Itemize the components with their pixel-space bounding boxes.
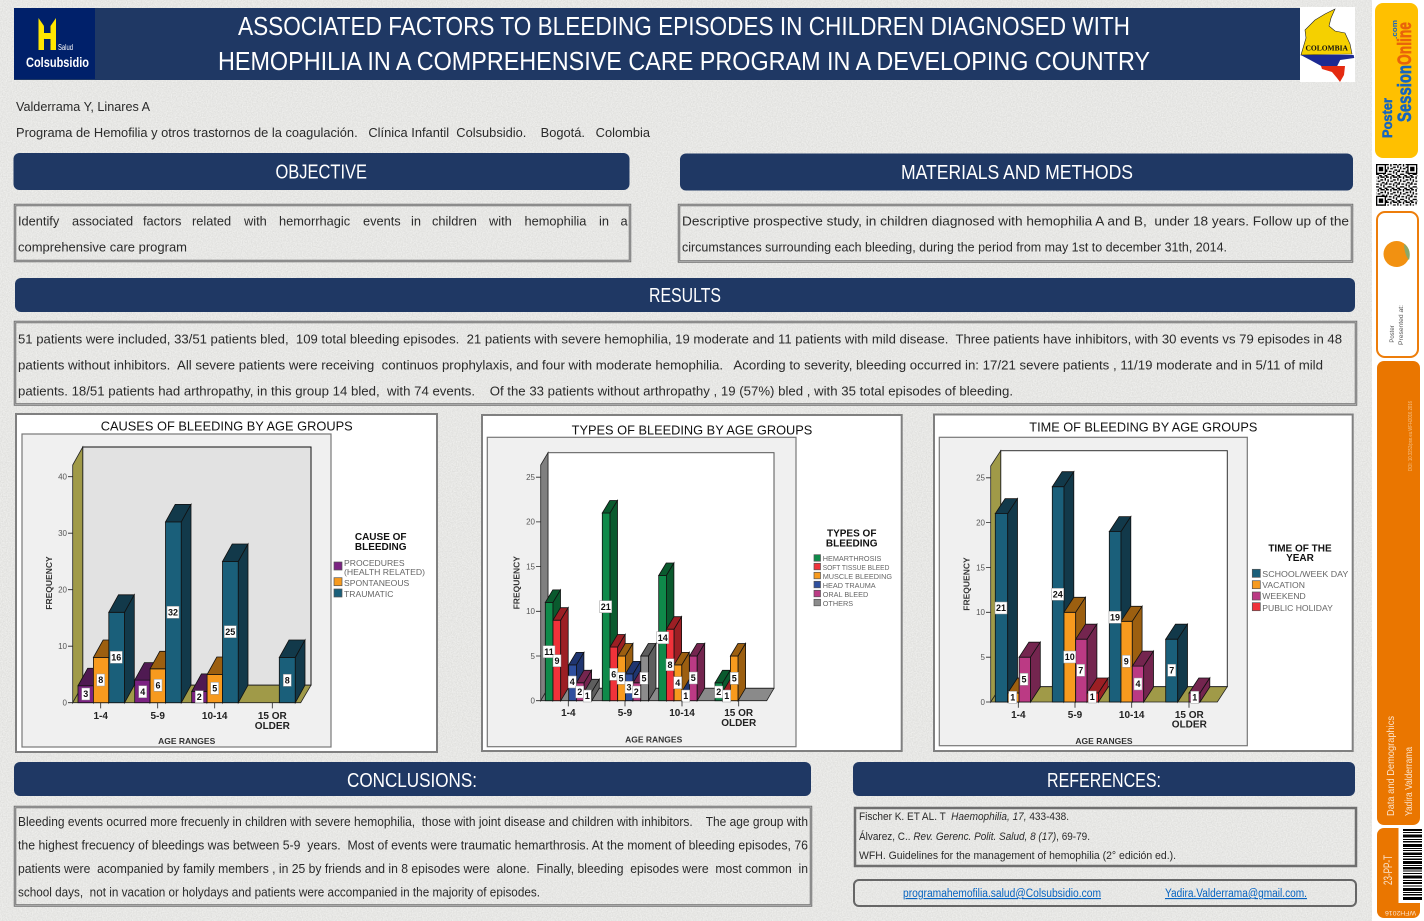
x axis: 15 OR bbox=[724, 708, 754, 719]
x axis: OLDER bbox=[1172, 720, 1208, 730]
value labels: 5 bbox=[618, 674, 624, 684]
panel: references list: Álvarez, C.. Rev. Gerenc. Polit. Salud, 8 (17), 69-79. bbox=[859, 830, 1090, 843]
x axis bbox=[561, 701, 757, 744]
value labels: 19 bbox=[1110, 612, 1120, 622]
sidebar: poster code and barcode: 23-PP-T bbox=[1381, 855, 1395, 885]
legend: PUBLIC HOLIDAY bbox=[1262, 603, 1333, 613]
x axis: 5-9 bbox=[150, 711, 165, 722]
legend: MUSCLE BLEEDING bbox=[823, 572, 892, 581]
value labels: 14 bbox=[658, 633, 668, 643]
value labels: 8 bbox=[667, 660, 673, 670]
bars: age 10-14 bbox=[659, 563, 705, 701]
value labels: 3 bbox=[83, 689, 88, 699]
y axis: 10 bbox=[526, 607, 536, 616]
panel: objective text: hemorrhagic bbox=[279, 214, 351, 228]
y axis: FREQUENCY bbox=[512, 556, 522, 609]
value labels: 1 bbox=[724, 691, 729, 701]
value labels: 1 bbox=[585, 691, 590, 701]
value labels: 6 bbox=[611, 670, 616, 680]
y axis: 15 bbox=[976, 563, 986, 572]
panel: objective text: a bbox=[620, 214, 628, 228]
y axis: FREQUENCY bbox=[44, 556, 54, 610]
affiliation: Programa de Hemofilia y otros trastornos de la coagulación. Clínica Infantil Colsubsidio. Bogotá. Colombia bbox=[16, 125, 651, 140]
sidebar: PosterSessionOnline badge: Poster bbox=[1379, 97, 1395, 138]
heading: conclusions bbox=[14, 762, 811, 796]
panel: materials and methods text: circumstances surrounding each bleeding, during the period from may 1st to december 31th, 2014. bbox=[682, 240, 1227, 254]
panel: objective text: comprehensive care program bbox=[18, 240, 187, 254]
plot area bbox=[22, 434, 331, 747]
chart title: CAUSES OF BLEEDING BY AGE GROUPS bbox=[101, 419, 353, 434]
panel: materials and methods text: Descriptive prospective study, in children diagnosed with hemophilia A and B, under 18 years. Follow up of the bbox=[682, 214, 1349, 228]
panel: conclusions text: school days, not in vacation or holydays and patients were accompanied in the majority of episodes. bbox=[18, 884, 540, 900]
bars: age 1-4 bbox=[78, 595, 134, 703]
panel: results text bbox=[15, 322, 1356, 404]
value labels: 4 bbox=[1135, 679, 1141, 689]
x axis: 10-14 bbox=[1119, 710, 1145, 721]
legend: HEMARTHROSIS bbox=[823, 554, 881, 563]
value labels: 10 bbox=[1065, 652, 1075, 662]
panel: results text: patients without inhibitors. All severe patients were receiving continuos prophylaxis, and four with moderate hemophilia. Acording to severity, bleeding occurred in: 17/21 severe patients , 11/19 moderate and in 5/11 of mild bbox=[18, 358, 1323, 372]
panel: references list: WFH. Guidelines for the management of hemophilia (2° edición ed.). bbox=[859, 850, 1176, 862]
panel: objective text: Identify bbox=[18, 214, 60, 228]
value labels: 9 bbox=[1124, 656, 1129, 666]
y axis: 0 bbox=[981, 698, 986, 707]
value labels: 4 bbox=[675, 678, 680, 688]
y axis: 0 bbox=[63, 698, 68, 708]
y axis: 25 bbox=[976, 474, 986, 483]
sidebar: orange info panel bbox=[1377, 361, 1420, 825]
panel: materials and methods text bbox=[679, 205, 1352, 262]
sidebar: orange info panel: DOI: 10.3252/pso.eu.WFH2016.2016 bbox=[1408, 401, 1414, 471]
logo: Colsubsidio bbox=[14, 8, 95, 79]
y axis: 20 bbox=[58, 586, 68, 594]
y axis: 5 bbox=[531, 652, 536, 661]
title text bbox=[218, 11, 1150, 76]
y axis: 20 bbox=[526, 518, 536, 527]
logo: Colsubsidio: Salud bbox=[58, 43, 73, 52]
panel: conclusions text: patients were acompanied by family members , in 25 by friends and in 8 episodes were alone. Finally, bleeding episodes were most common in bbox=[18, 861, 808, 876]
legend: SPONTANEOUS bbox=[344, 578, 410, 588]
x axis: OLDER bbox=[255, 721, 291, 732]
heading: objective: OBJECTIVE bbox=[276, 162, 367, 184]
legend: CAUSE OF bbox=[355, 532, 407, 543]
legend: SOFT TISSUE BLEED bbox=[823, 563, 889, 572]
legend bbox=[334, 532, 425, 599]
legend: BLEEDING bbox=[355, 542, 407, 553]
y axis: 0 bbox=[531, 696, 536, 706]
panel: conclusions text: the highest frecuency of bleedings was between 5-9 years. Most of events were traumatic hemarthrosis. At the moment of bleeding episodes, 76 bbox=[18, 838, 808, 852]
heading: results: RESULTS bbox=[649, 285, 721, 307]
x axis: 5-9 bbox=[618, 708, 633, 719]
value labels: 1 bbox=[1010, 692, 1015, 702]
panel: objective text: factors bbox=[143, 214, 181, 228]
value labels: 16 bbox=[111, 652, 121, 662]
x axis: 15 OR bbox=[1175, 710, 1205, 721]
value labels: 5 bbox=[212, 684, 217, 694]
heading: objective bbox=[14, 153, 630, 190]
panel: objective text: in bbox=[599, 214, 609, 228]
value labels: 9 bbox=[554, 656, 560, 666]
panel: contact emails bbox=[854, 880, 1356, 906]
value labels: 21 bbox=[996, 603, 1006, 613]
y axis: 10 bbox=[58, 642, 68, 651]
panel: references list bbox=[855, 808, 1356, 866]
sidebar: PosterSessionOnline badge: .com bbox=[1392, 20, 1399, 39]
sidebar: QR code bbox=[1376, 164, 1417, 206]
value labels: 32 bbox=[168, 608, 178, 618]
legend bbox=[814, 529, 892, 608]
value labels: 1 bbox=[1192, 692, 1197, 702]
bars: age 5-9 bbox=[602, 500, 656, 701]
panel: conclusions text: Bleeding events ocurred more frecuenly in children with severe hemophilia, those with joint disease and children with inhibitors. The age group with bbox=[18, 814, 808, 829]
heading: materials and methods bbox=[680, 154, 1353, 190]
legend: ORAL BLEED bbox=[823, 590, 868, 599]
value labels: 7 bbox=[1169, 666, 1174, 676]
value labels: 11 bbox=[544, 647, 554, 657]
y axis: 20 bbox=[976, 518, 986, 527]
legend: PROCEDURES bbox=[344, 558, 405, 568]
heading: conclusions: CONCLUSIONS: bbox=[347, 770, 477, 792]
value labels: 24 bbox=[1053, 590, 1063, 600]
panel: contact emails: programahemofilia.salud@Colsubsidio.com bbox=[903, 888, 1101, 900]
value labels bbox=[995, 588, 1199, 703]
value labels: 2 bbox=[577, 687, 582, 697]
sidebar: orange info panel: Data and Demographics bbox=[1386, 716, 1397, 816]
value labels: 5 bbox=[641, 674, 647, 684]
value labels: 8 bbox=[98, 675, 103, 685]
panel: objective text bbox=[15, 205, 630, 261]
sidebar: presented at box bbox=[1377, 212, 1418, 357]
value labels: 8 bbox=[285, 676, 290, 686]
panel: objective text: related bbox=[192, 214, 231, 228]
legend: SCHOOL/WEEK DAY bbox=[1262, 569, 1349, 579]
plot area bbox=[939, 437, 1247, 746]
x axis: 10-14 bbox=[669, 708, 695, 719]
presented at text: Presented at: bbox=[1399, 305, 1405, 345]
sidebar: PosterSessionOnline badge: Online bbox=[1395, 22, 1416, 65]
legend: HEAD TRAUMA bbox=[823, 581, 876, 590]
y axis bbox=[962, 474, 991, 707]
heading: materials and methods: MATERIALS AND METHODS bbox=[901, 162, 1133, 184]
legend: YEAR bbox=[1286, 553, 1315, 564]
logo: Colombia map bbox=[1300, 7, 1355, 82]
sidebar: PosterSessionOnline badge bbox=[1375, 3, 1418, 158]
icon: congress logo bbox=[1384, 241, 1410, 267]
legend: BLEEDING bbox=[826, 539, 878, 550]
x axis bbox=[93, 703, 291, 746]
panel: objective text: associated bbox=[72, 214, 133, 228]
value labels: 1 bbox=[1090, 692, 1095, 702]
panel: objective text: in bbox=[411, 214, 421, 228]
value labels: 6 bbox=[155, 680, 161, 690]
x axis: 1-4 bbox=[1011, 710, 1026, 721]
panel: references list: Fischer K. ET AL. T Haemophilia, 17, 433-438. bbox=[859, 811, 1069, 823]
legend bbox=[1252, 543, 1349, 613]
bars: age 10-14 bbox=[1109, 517, 1154, 702]
y axis: FREQUENCY bbox=[962, 557, 972, 611]
value labels: 1 bbox=[683, 691, 688, 701]
presented at text: Poster bbox=[1390, 325, 1396, 343]
sidebar: poster code and barcode: WFH2016 bbox=[1385, 909, 1416, 916]
y axis: 30 bbox=[58, 529, 68, 538]
panel: objective text: children bbox=[432, 214, 477, 228]
title text: ASSOCIATED FACTORS TO BLEEDING EPISODES IN CHILDREN DIAGNOSED WITH bbox=[238, 11, 1130, 41]
presented at text bbox=[1390, 305, 1405, 345]
sidebar: PosterSessionOnline badge: Session bbox=[1395, 65, 1416, 122]
value labels: 2 bbox=[716, 687, 721, 697]
legend: OTHERS bbox=[823, 599, 853, 608]
legend: TRAUMATIC bbox=[344, 589, 394, 599]
value labels bbox=[543, 601, 738, 702]
y axis: 40 bbox=[58, 472, 68, 482]
bars: age 5-9 bbox=[135, 504, 191, 703]
heading: references: REFERENCES: bbox=[1047, 770, 1161, 792]
panel: objective text: hemophilia bbox=[524, 214, 587, 228]
x axis: 10-14 bbox=[202, 711, 228, 722]
bars: age 15 or older bbox=[1166, 624, 1210, 702]
x axis bbox=[1011, 702, 1208, 746]
x axis: 1-4 bbox=[561, 708, 576, 719]
value labels bbox=[82, 606, 291, 703]
x axis: AGE RANGES bbox=[158, 736, 216, 746]
panel: results text: patients. 18/51 patients had arthropathy, in this group 14 bled, with 74 events. Of the 33 patients without arthropathy , 19 (57%) bled , with 35 total episodes of bleeding. bbox=[18, 384, 1013, 398]
sidebar: orange info panel: Yadira Valderrama bbox=[1404, 747, 1415, 816]
chart: types of bleeding by age groups bbox=[482, 415, 902, 751]
panel: contact emails: Yadira.Valderrama@gmail.com. bbox=[1165, 888, 1307, 900]
chart title: TIME OF BLEEDING BY AGE GROUPS bbox=[1029, 419, 1258, 434]
x axis: 15 OR bbox=[258, 711, 288, 722]
chart: causes of bleeding by age groups bbox=[16, 414, 437, 752]
panel: results text: 51 patients were included, 33/51 patients bled, 109 total bleeding episodes. 21 patients with severe hemophilia, 19 moderate and 11 patients with mild disease. Three patients have inhibitors, with 30 events vs 79 episodes in 48 bbox=[18, 332, 1342, 346]
legend: TYPES OF bbox=[827, 529, 876, 540]
panel: objective text: with bbox=[243, 214, 267, 228]
legend: (HEALTH RELATED) bbox=[344, 567, 425, 577]
value labels: 4 bbox=[140, 687, 145, 697]
title banner bbox=[14, 7, 1355, 82]
y axis: 5 bbox=[981, 653, 986, 662]
y axis bbox=[44, 472, 73, 708]
panel: objective text: events bbox=[363, 214, 401, 228]
value labels: 4 bbox=[570, 677, 575, 687]
plot area bbox=[487, 437, 796, 747]
value labels: 3 bbox=[626, 682, 632, 692]
y axis: 10 bbox=[976, 608, 986, 617]
panel: conclusions text bbox=[15, 807, 811, 906]
value labels: 5 bbox=[732, 674, 737, 684]
bars: age 15 or older bbox=[279, 640, 305, 703]
bars: age 1-4 bbox=[995, 499, 1040, 702]
bars: age 1-4 bbox=[545, 590, 599, 701]
barcode bbox=[1403, 829, 1422, 900]
x axis: 1-4 bbox=[93, 711, 108, 722]
bars: age 5-9 bbox=[1052, 472, 1108, 702]
x axis: OLDER bbox=[721, 718, 757, 729]
title text: HEMOPHILIA IN A COMPREHENSIVE CARE PROGRAM IN A DEVELOPING COUNTRY bbox=[218, 46, 1150, 76]
y axis bbox=[512, 473, 541, 706]
legend: WEEKEND bbox=[1262, 591, 1306, 601]
heading: references bbox=[853, 762, 1355, 796]
value labels: 21 bbox=[601, 602, 611, 612]
chart: time of bleeding by age groups bbox=[934, 414, 1353, 751]
value labels: 2 bbox=[197, 692, 202, 702]
value labels: 5 bbox=[1021, 674, 1027, 684]
bars: age 10-14 bbox=[192, 544, 248, 703]
x axis: AGE RANGES bbox=[625, 734, 683, 744]
authors: Valderrama Y, Linares A bbox=[16, 99, 150, 114]
value labels: 5 bbox=[691, 673, 696, 683]
x axis: 5-9 bbox=[1068, 710, 1083, 721]
legend: VACATION bbox=[1262, 580, 1305, 590]
y axis: 15 bbox=[526, 562, 536, 571]
sidebar: poster code and barcode bbox=[1377, 828, 1422, 918]
x axis: AGE RANGES bbox=[1075, 736, 1133, 746]
legend: TIME OF THE bbox=[1268, 543, 1332, 554]
value labels: 2 bbox=[634, 687, 639, 697]
bars: age 15 or older bbox=[715, 644, 746, 701]
logo: Colsubsidio: Colsubsidio bbox=[26, 54, 89, 70]
logo: Colombia map: COLOMBIA bbox=[1305, 44, 1349, 53]
y axis: 25 bbox=[526, 473, 536, 482]
value labels: 25 bbox=[225, 627, 235, 637]
chart title: TYPES OF BLEEDING BY AGE GROUPS bbox=[572, 423, 813, 438]
heading: results bbox=[15, 278, 1355, 312]
panel: objective text: with bbox=[488, 214, 512, 228]
value labels: 7 bbox=[1078, 666, 1083, 676]
